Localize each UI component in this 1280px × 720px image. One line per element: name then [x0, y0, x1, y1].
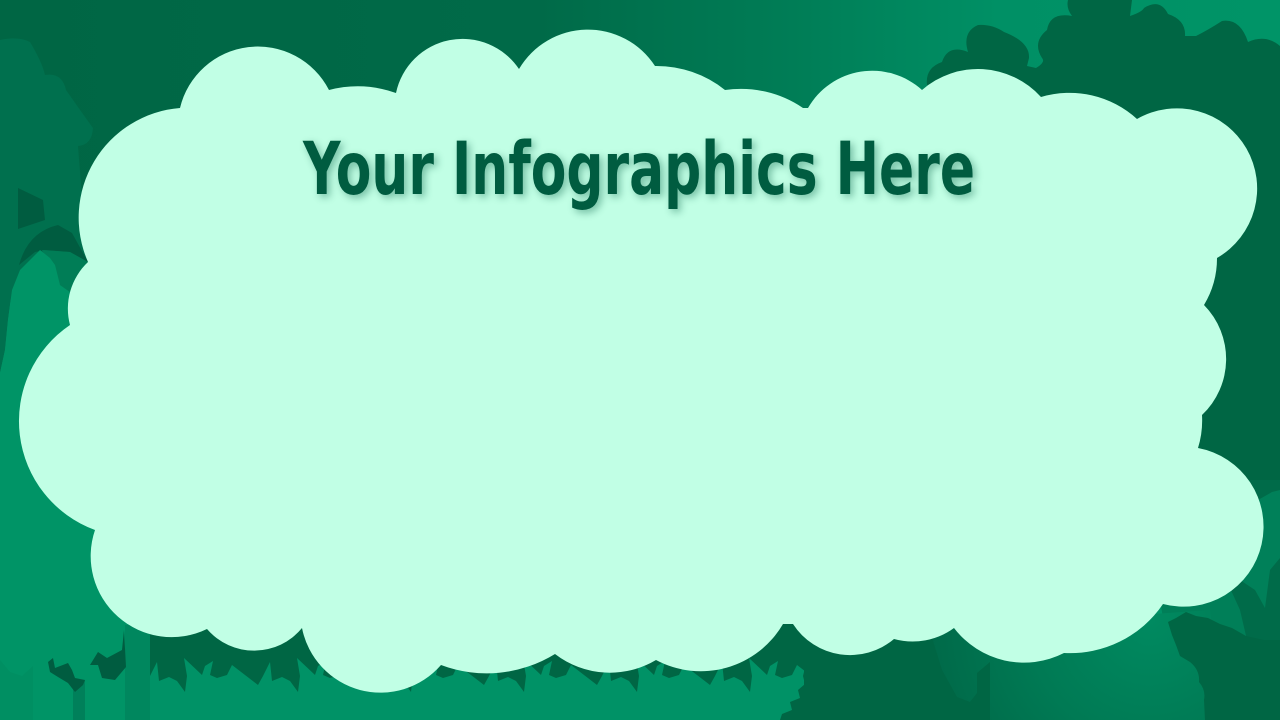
dark leaves left [48, 658, 85, 692]
title: Your Infographics Here [302, 127, 975, 212]
dark undergrowth behind grass [148, 620, 808, 692]
title [302, 127, 978, 215]
title: Your Infographics Here [305, 130, 978, 215]
dark leaves near trunk [90, 630, 126, 680]
grass band [0, 620, 810, 720]
top right dark tree canopy [927, 0, 1280, 500]
tree trunk [125, 625, 150, 720]
right side trunk and branches [1160, 480, 1280, 720]
bottom right glowing bush [925, 610, 1225, 720]
small trunk [73, 680, 85, 720]
scalloped bush edge over grass [780, 668, 810, 720]
medium green behind bush [42, 250, 88, 292]
faint bush at lower left [0, 660, 33, 720]
dark arch behind bush [19, 225, 88, 265]
left forest tree silhouettes [0, 38, 170, 720]
light bush on left [0, 250, 70, 400]
dark patch in left tree [18, 188, 45, 229]
grass blades [150, 650, 804, 720]
bottom right dark bushes [776, 612, 1280, 720]
